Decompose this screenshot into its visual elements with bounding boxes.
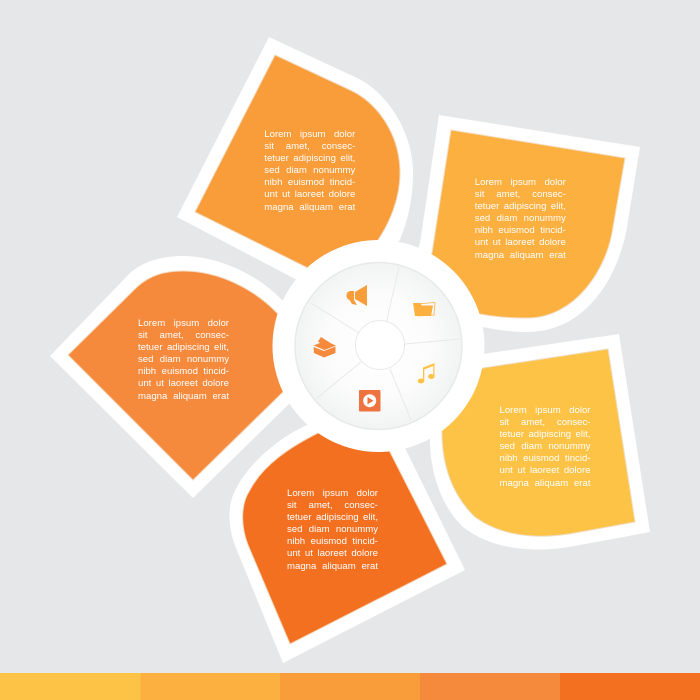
text: bottom petal: tetuer adipiscing elit,: [287, 512, 378, 523]
panel: top-right petal: [400, 115, 640, 332]
text: top-left petal: [264, 128, 356, 218]
icon: music note: [418, 363, 435, 384]
text: bottom petal: sed diam nonummy: [287, 524, 378, 535]
icon: play button: [359, 390, 380, 412]
text: top-left petal: nibh euismod tincid-: [264, 177, 355, 188]
text: top-left petal: magna aliquam erat: [264, 202, 355, 213]
text: left petal: sed diam nonummy: [138, 354, 229, 365]
text: bottom petal: Lorem ipsum dolor: [287, 488, 378, 498]
text: bottom petal: sit amet, consec-: [287, 500, 378, 511]
text: right petal: sit amet, consec-: [500, 417, 590, 428]
text: top-right petal: [475, 176, 567, 266]
text: top-right petal: Lorem ipsum dolor: [475, 176, 566, 188]
text: left petal: Lorem ipsum dolor: [138, 318, 229, 328]
text: top-right petal: unt ut laoreet dolore: [475, 237, 566, 248]
text: top-left petal: sed diam nonummy: [264, 165, 355, 176]
text: bottom petal: unt ut laoreet dolore: [287, 548, 378, 559]
text: left petal: magna aliquam erat: [138, 391, 229, 402]
panel: top-left petal: [177, 37, 413, 300]
text: left petal: [138, 318, 230, 408]
text: bottom petal: [287, 488, 379, 578]
text: left petal: nibh euismod tincid-: [138, 366, 229, 377]
text: top-right petal: sed diam nonummy: [475, 213, 566, 224]
text: bottom petal: nibh euismod tincid-: [287, 536, 378, 547]
text: right petal: unt ut laoreet dolore: [500, 465, 590, 476]
panel: right petal: [420, 334, 650, 549]
text: right petal: magna aliquam erat: [500, 478, 590, 489]
icon: printer: [314, 337, 336, 358]
icon: folder: [413, 302, 435, 316]
text: right petal: [500, 404, 592, 494]
text: bottom petal: magna aliquam erat: [287, 561, 378, 572]
text: left petal: unt ut laoreet dolore: [138, 378, 229, 389]
text: top-right petal: tetuer adipiscing elit,: [475, 201, 566, 212]
bottom colour bar: [0, 673, 700, 700]
text: top-left petal: Lorem ipsum dolor: [264, 128, 355, 140]
text: right petal: tetuer adipiscing elit,: [500, 429, 590, 440]
text: left petal: tetuer adipiscing elit,: [138, 342, 229, 353]
panel: left petal: [50, 256, 380, 498]
text: top-right petal: magna aliquam erat: [475, 250, 566, 261]
text: right petal: sed diam nonummy: [500, 441, 590, 452]
icon: speaker: [346, 285, 367, 306]
text: top-left petal: tetuer adipiscing elit,: [264, 153, 355, 164]
text: left petal: sit amet, consec-: [138, 330, 229, 341]
text: top-left petal: unt ut laoreet dolore: [264, 189, 355, 200]
central hub: [272, 240, 484, 452]
panel: bottom petal: [229, 380, 465, 663]
text: right petal: Lorem ipsum dolor: [500, 404, 590, 416]
text: top-right petal: nibh euismod tincid-: [475, 225, 566, 236]
text: top-left petal: sit amet, consec-: [264, 141, 355, 152]
text: right petal: nibh euismod tincid-: [500, 453, 590, 464]
text: top-right petal: sit amet, consec-: [475, 189, 566, 200]
